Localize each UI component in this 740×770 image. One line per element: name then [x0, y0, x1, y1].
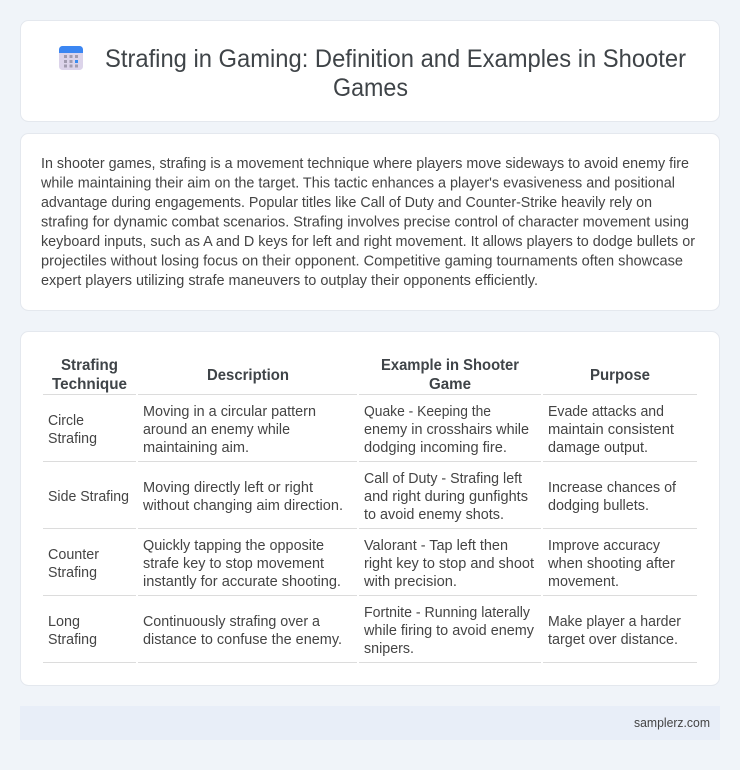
table row: long strafing: while firing to avoid enemy: [363, 622, 534, 639]
table row: long strafing: Strafing: [48, 631, 97, 648]
table row: side strafing: Call of Duty - Strafing left: [364, 470, 523, 487]
table row: side strafing: Moving directly left or right: [143, 479, 314, 496]
table row: counter strafing: strafe key to stop movement: [143, 555, 325, 572]
table header: Example in Shooter: [381, 357, 519, 374]
table row: counter strafing: Strafing: [48, 564, 97, 581]
table row: long strafing: Fortnite - Running laterally: [364, 604, 530, 621]
table row: circle strafing: maintaining aim.: [143, 439, 249, 456]
table row: counter strafing: when shooting after: [547, 555, 675, 572]
table row: circle strafing: Moving in a circular pattern: [143, 403, 316, 420]
table row: circle strafing: dodging incoming fire.: [364, 439, 507, 456]
table row: side strafing: dodging bullets.: [548, 497, 649, 514]
text block: intro: expert players utilizing strafe maneuvers to outplay their opponents efficiently.: [41, 272, 538, 289]
table row: counter strafing: [48, 537, 675, 590]
table row: long strafing: [48, 604, 681, 657]
table row: counter strafing: Improve accuracy: [548, 537, 660, 554]
table row: circle strafing: Quake - Keeping the: [364, 403, 491, 420]
table row: counter strafing: with precision.: [363, 573, 457, 590]
table row: counter strafing: Valorant - Tap left then: [364, 537, 508, 554]
table row: circle strafing: Strafing: [48, 430, 97, 447]
table rules: [43, 394, 697, 663]
table row: counter strafing: movement.: [548, 573, 619, 590]
table header: Description: [207, 367, 289, 384]
table row: counter strafing: Quickly tapping the opposite: [143, 537, 324, 554]
table row: counter strafing: Counter: [48, 546, 99, 563]
table row: counter strafing: instantly for accurate shooting.: [143, 573, 341, 590]
icon: calendar: [59, 46, 83, 70]
table row: circle strafing: maintain consistent: [548, 421, 675, 438]
table row: long strafing: Long: [48, 613, 80, 630]
text block: intro: while maintaining their aim on the target. This tactic enhances a player's evasiveness and positional: [40, 174, 675, 192]
table row: counter strafing: right key to stop and shoot: [364, 555, 535, 572]
table row: long strafing: Continuously strafing over a: [143, 613, 321, 630]
table row: long strafing: snipers.: [364, 640, 414, 657]
table row: side strafing: Increase chances of: [548, 479, 677, 496]
table header: Technique: [52, 376, 127, 393]
table row: circle strafing: Circle: [48, 412, 84, 429]
table row: side strafing: Side Strafing: [48, 488, 129, 505]
text block: intro: strafing for dynamic combat scenarios. Strafing involves precise control of character movement using: [41, 214, 689, 230]
table row: side strafing: and right during gunfights: [364, 488, 528, 505]
footer bar: [20, 706, 720, 740]
table row: side strafing: [48, 470, 677, 523]
panel: title card: [20, 20, 720, 122]
table header: [52, 357, 650, 393]
table row: side strafing: without changing aim direction.: [142, 497, 343, 514]
text block: intro: projectiles without losing focus on their opponent. Competitive gaming tournaments often showcase: [41, 252, 683, 270]
table row: circle strafing: damage output.: [548, 439, 648, 456]
table row: circle strafing: [48, 403, 675, 456]
table row: circle strafing: enemy in crosshairs while: [364, 421, 529, 438]
table row: long strafing: target over distance.: [548, 631, 678, 648]
title: Games: [333, 74, 408, 102]
title: [105, 45, 686, 102]
text block: intro: In shooter games, strafing is a movement technique where players move sideways to avoid enemy fire: [41, 155, 689, 172]
text block: intro: keyboard inputs, such as A and D keys for left and right movement. It allows players to dodge bullets or: [41, 233, 695, 250]
table row: long strafing: distance to confuse the enemy.: [143, 631, 342, 648]
text block: intro: [40, 155, 695, 289]
table row: circle strafing: Evade attacks and: [548, 403, 664, 420]
table header: Purpose: [590, 367, 650, 384]
table row: long strafing: Make player a harder: [548, 613, 681, 630]
footer text: samplerz.com: [634, 716, 710, 730]
table row: side strafing: to avoid enemy shots.: [364, 506, 504, 523]
panel: table card: [20, 332, 720, 686]
text block: intro: advantage during engagements. Popular titles like Call of Duty and Counter-Strike heavily rely on: [41, 194, 652, 211]
table header: Game: [429, 376, 471, 393]
table header: Strafing: [61, 357, 118, 374]
panel: intro paragraph: [20, 134, 720, 310]
table row: circle strafing: around an enemy while: [143, 421, 290, 438]
title: Strafing in Gaming: Definition and Examples in Shooter: [105, 45, 686, 73]
